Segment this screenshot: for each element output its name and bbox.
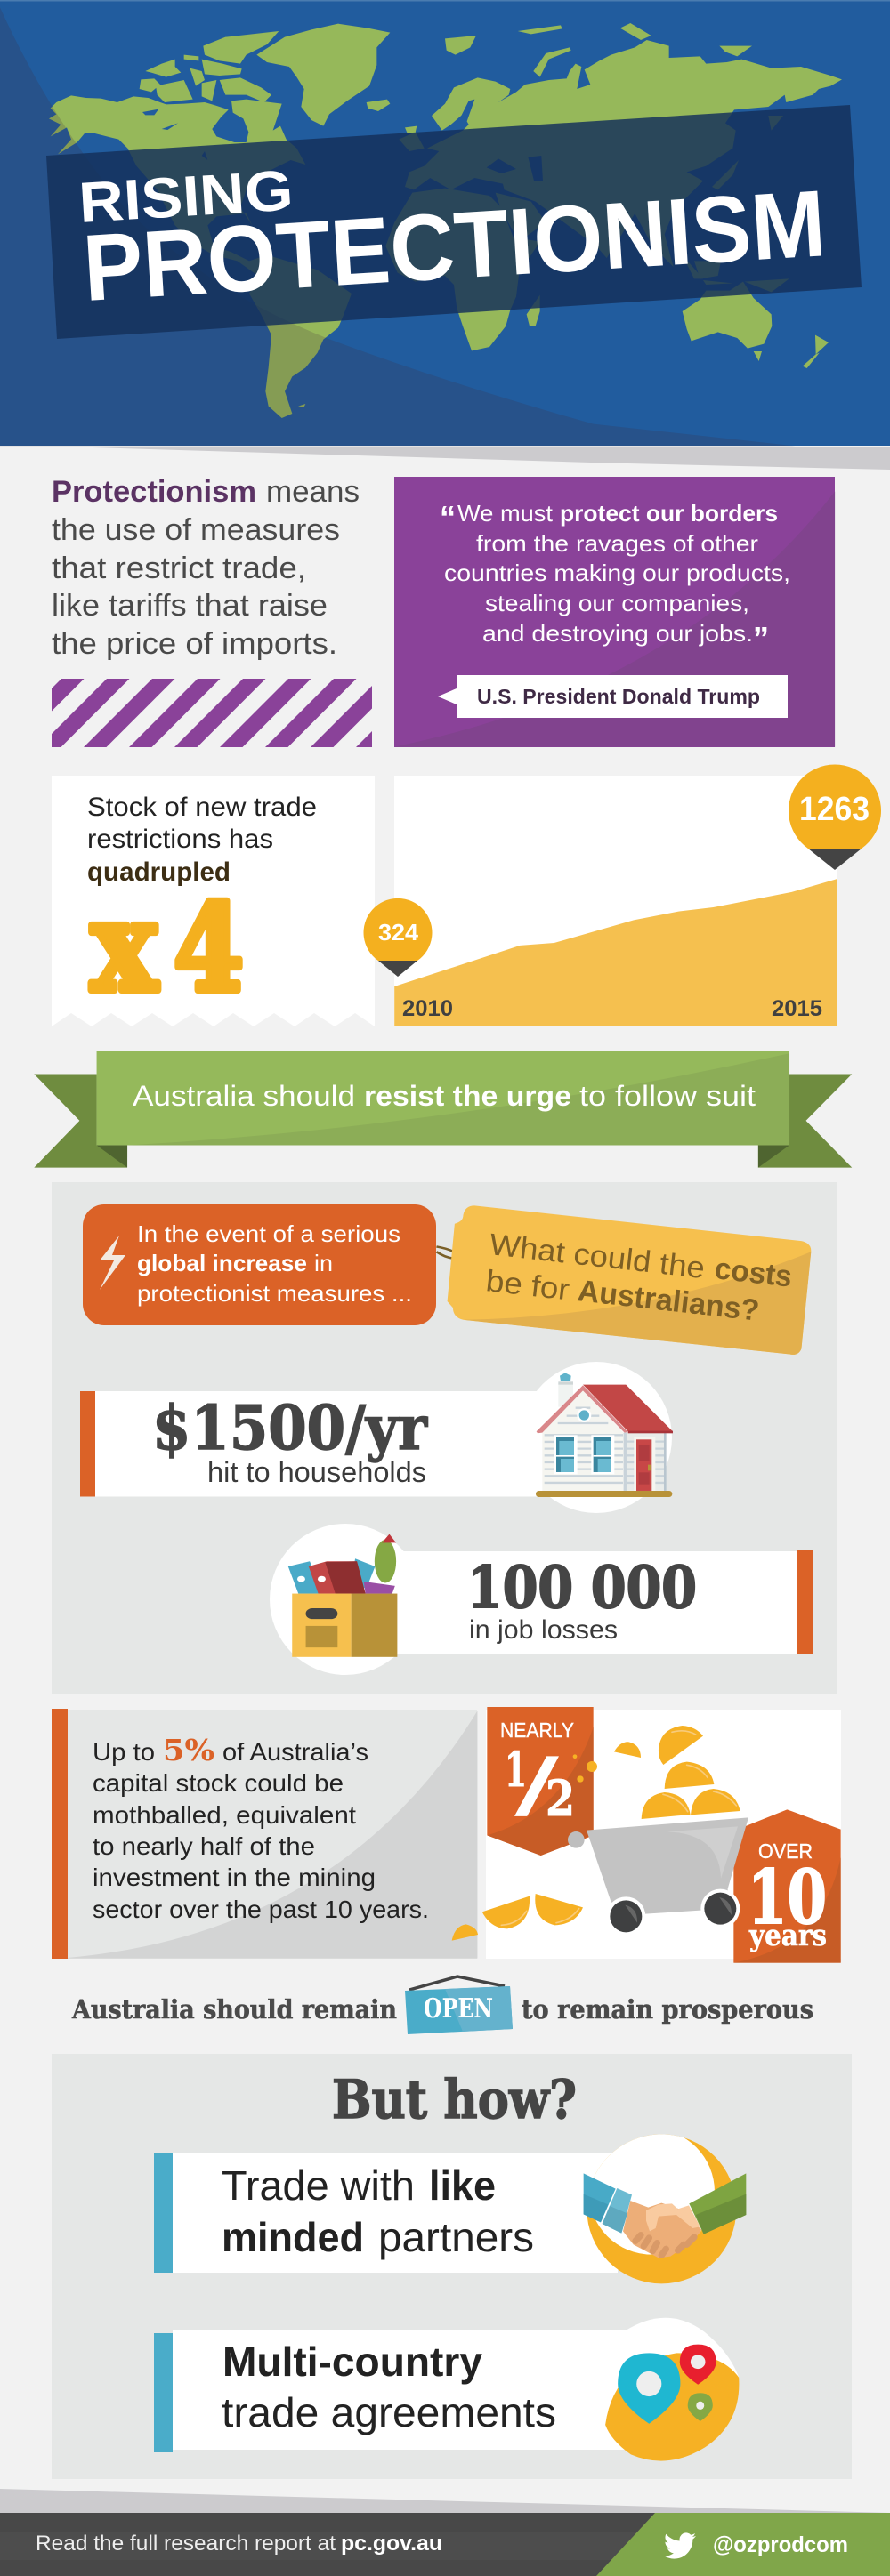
attribution bubble: [438, 675, 788, 718]
panel: capital stock text: investment in the mining: [93, 1864, 376, 1891]
quote text: [440, 499, 790, 656]
stat: households: hit to households: [207, 1456, 426, 1488]
definition text block: that restrict trade,: [52, 551, 306, 585]
panel: capital stock text: Up to: [93, 1738, 155, 1766]
tag: what could the costs be: What could the: [488, 1228, 707, 1285]
statement: remain open: Australia should remain: [71, 1994, 397, 2025]
area chart: 2010: [402, 996, 453, 1021]
pin: 324: 324: [378, 919, 419, 946]
attribution bubble: U.S. President Donald Trump: [477, 685, 760, 708]
panel: trade restrictions: Stock of new trade: [87, 793, 317, 822]
heading: but how?: But how?: [332, 2069, 577, 2131]
definition text block: [52, 475, 360, 661]
card: multi-country agreements: Multi-country: [222, 2339, 482, 2385]
quote text: ”: [753, 620, 769, 656]
panel: costs to australians: [52, 1182, 837, 1694]
panel: but how: [52, 2054, 852, 2479]
stat: job losses: [270, 1524, 813, 1675]
icon: open sign: [405, 1976, 513, 2034]
definition text block: the price of imports.: [52, 627, 337, 661]
pin: 1263: 1263: [799, 791, 870, 828]
callout: global increase: In the event of a serious: [137, 1220, 400, 1247]
footer: [0, 2489, 890, 2576]
title: rising: RISING: [77, 157, 295, 235]
title: protectionism: PROTECTIONISM: [80, 171, 829, 321]
quote text: countries making our products,: [444, 559, 790, 586]
icon: handshake: [584, 2129, 746, 2283]
statement: remain open: to remain prosperous: [522, 1994, 813, 2025]
ribbon banner: resist the urge: [364, 1080, 571, 1112]
flag: over 10 years: 10: [748, 1854, 827, 1941]
panel: capital stock text: 5%: [163, 1733, 214, 1767]
icon: twitter bird: [664, 2532, 696, 2559]
panel: trade restrictions: restrictions has: [87, 825, 273, 854]
panel: trade restrictions: [52, 776, 375, 1026]
twitter panel: [596, 2513, 890, 2576]
x4 figure: 4: [174, 877, 244, 1018]
panel: capital stock text: [52, 1709, 477, 1959]
card: like minded partners: like: [429, 2162, 496, 2209]
quote text: stealing our companies,: [485, 590, 749, 616]
icon: mining cart and gold: [452, 1726, 748, 1941]
ribbon banner: Australia should: [133, 1080, 355, 1112]
flag: over 10 years: OVER: [758, 1839, 813, 1863]
tag: what could the costs be: [436, 1205, 811, 1355]
tag: what could the costs be: be for: [484, 1264, 571, 1307]
card: like minded partners: minded: [222, 2214, 364, 2260]
definition text block: means: [266, 475, 360, 509]
flag: over 10 years: years: [748, 1918, 827, 1952]
x4 figure: x: [91, 873, 159, 1020]
card: multi-country agreements: trade agreements: [222, 2389, 556, 2435]
quote text: and destroying our jobs.: [482, 620, 753, 647]
panel: trump quote: [394, 477, 835, 747]
callout: global increase: [83, 1204, 436, 1325]
callout: global increase: in: [314, 1250, 333, 1276]
panel: trade restrictions: quadrupled: [87, 857, 231, 887]
callout: global increase: protectionist measures ...: [137, 1280, 412, 1307]
card: multi-country agreements: [154, 2318, 739, 2461]
tag: what could the costs be: costs: [713, 1252, 794, 1294]
research report link: Read the full research report at: [36, 2532, 336, 2556]
quote text: from the ravages of other: [476, 530, 758, 557]
area chart: 2015: [772, 996, 822, 1021]
striped decoration: [52, 679, 372, 747]
flag: nearly half: /: [514, 1743, 560, 1833]
flag: nearly half: 2: [546, 1769, 575, 1827]
panel: capital stock text: sector over the past 10 years.: [93, 1896, 429, 1923]
definition text block: Protectionism: [52, 475, 256, 509]
definition text block: the use of measures: [52, 513, 340, 547]
ribbon banner: to follow suit: [579, 1080, 756, 1112]
pin: 324: [363, 898, 433, 977]
hero header: [0, 0, 890, 446]
title banner: [46, 105, 862, 339]
statement: remain open: [71, 1976, 813, 2034]
icon: house: [536, 1373, 673, 1497]
stat: households: $1500/yr: [152, 1393, 428, 1464]
card: like minded partners: [154, 2129, 746, 2283]
x4 figure: [91, 873, 244, 1020]
quote text: protect our borders: [560, 500, 778, 527]
flag: nearly half: [487, 1707, 594, 1856]
twitter panel: @ozprodcom: [713, 2532, 848, 2557]
quote text: We must: [457, 500, 554, 527]
flag: nearly half: NEARLY: [500, 1719, 574, 1742]
panel: mining cart illustration: [452, 1707, 841, 1963]
stat: households: [80, 1362, 673, 1513]
panel: capital stock text: capital stock could be: [93, 1769, 344, 1797]
area chart: [363, 765, 881, 1026]
flag: over 10 years: [733, 1809, 841, 1963]
definition text block: like tariffs that raise: [52, 589, 328, 623]
stat: job losses: 100 000: [467, 1554, 697, 1622]
card: like minded partners: Trade with: [222, 2162, 415, 2209]
icon: map pins: [605, 2318, 739, 2461]
icon: open sign: OPEN: [424, 1993, 493, 2025]
icon: box of office items: [288, 1534, 397, 1657]
icon: lightning bolt: [100, 1236, 125, 1290]
pin: 1263: [789, 765, 881, 870]
flag: nearly half: 1: [505, 1743, 527, 1798]
panel: capital stock text: mothballed, equivalent: [93, 1801, 356, 1829]
world map: [49, 23, 842, 418]
research report link: pc.gov.au: [341, 2532, 442, 2556]
tag: what could the costs be: Australians?: [576, 1274, 761, 1328]
quote text: “: [440, 499, 456, 535]
stat: job losses: in job losses: [469, 1615, 618, 1645]
ribbon banner: [34, 1051, 852, 1168]
callout: global increase: global increase: [137, 1250, 307, 1276]
panel: capital stock text: to nearly half of the: [93, 1832, 315, 1860]
card: like minded partners: partners: [378, 2214, 534, 2260]
panel: capital stock text: of Australia’s: [222, 1738, 368, 1766]
